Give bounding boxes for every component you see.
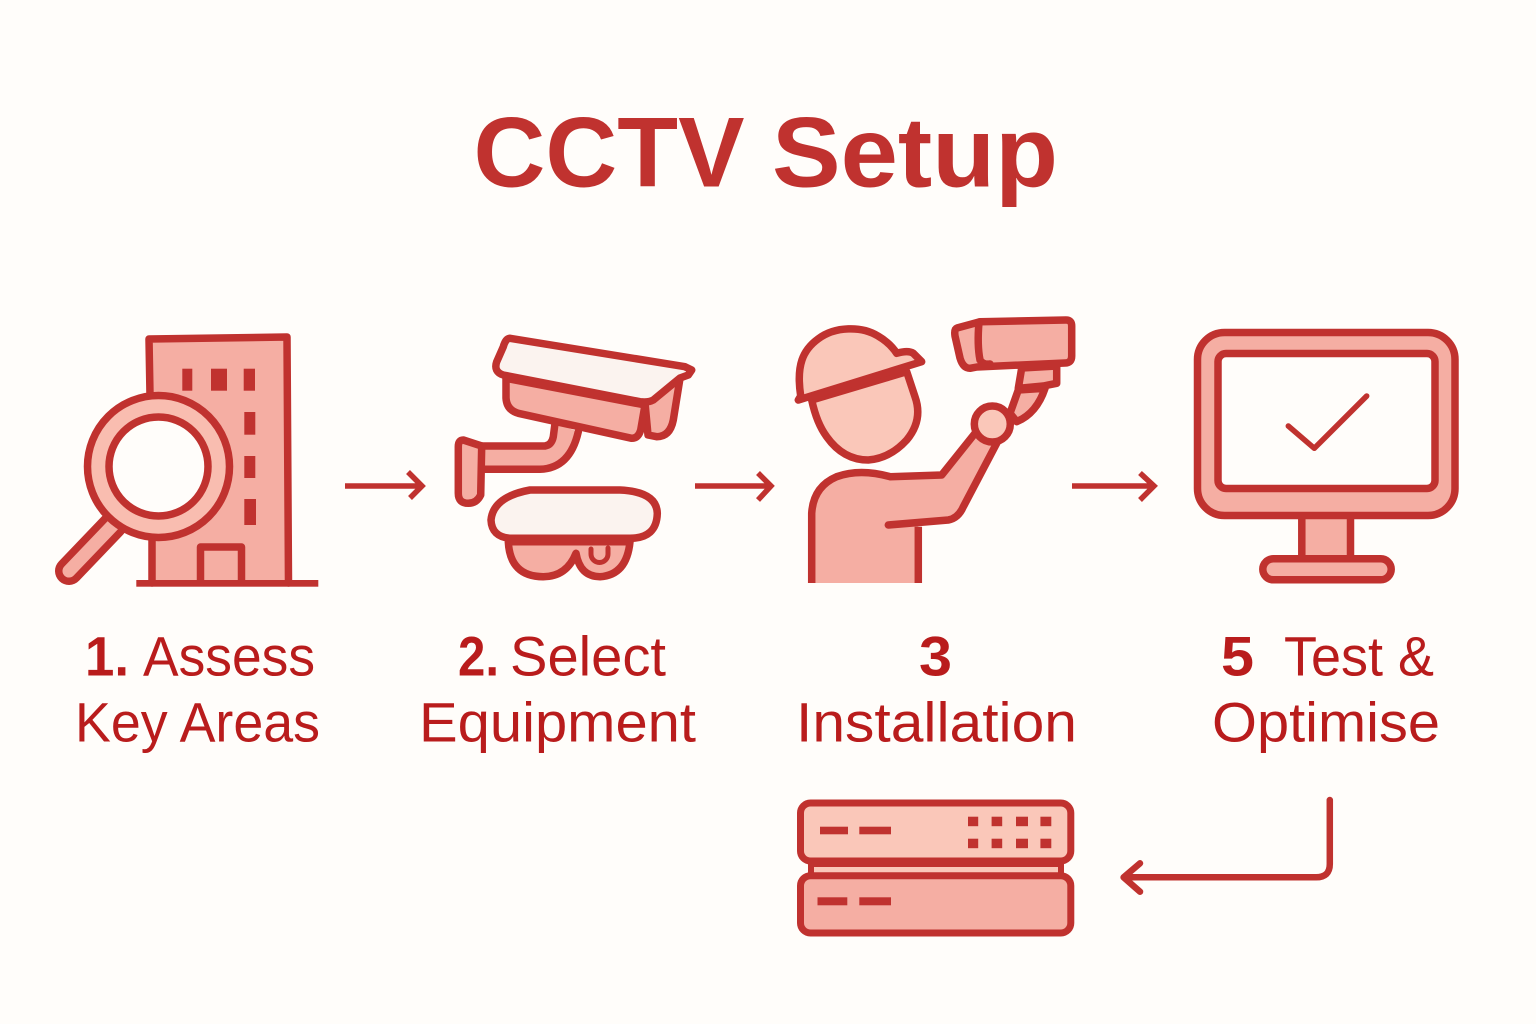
icon: technician installing a camera xyxy=(798,320,1072,583)
label: step 5 xyxy=(1212,624,1440,754)
label: step 1: Key Areas xyxy=(75,690,320,754)
technician body xyxy=(812,433,997,583)
label: step 2 xyxy=(419,624,696,754)
label: step 2: Equipment xyxy=(419,690,696,754)
arrow: step 5 back to recorder xyxy=(1124,800,1330,892)
camera held up xyxy=(955,320,1072,442)
label: step 3: Installation xyxy=(796,690,1077,754)
monitor screen xyxy=(1218,354,1435,488)
icon: monitor with check mark xyxy=(1198,332,1455,580)
check mark xyxy=(1288,396,1367,448)
icon: network video recorder xyxy=(800,803,1071,933)
monitor base xyxy=(1263,559,1391,580)
label: step 2: Select xyxy=(510,624,666,688)
technician head and helmet xyxy=(798,329,922,460)
label: step 5: 5 xyxy=(1221,624,1254,688)
label: step 2: 2. xyxy=(458,624,499,688)
arrow: step 3 to step 5 xyxy=(1072,473,1154,500)
recorder connector xyxy=(811,864,1061,876)
label: step 5: Optimise xyxy=(1212,690,1440,754)
icon: security cameras xyxy=(458,338,692,577)
dome camera xyxy=(491,490,657,577)
building xyxy=(136,337,318,587)
label: step 1 xyxy=(75,624,320,754)
label: step 1: Assess xyxy=(143,624,315,688)
monitor frame xyxy=(1198,332,1455,516)
arrow: step 2 to step 3 xyxy=(695,473,771,500)
title: CCTV xyxy=(474,96,744,208)
label: step 1: 1. xyxy=(85,624,129,688)
bullet camera xyxy=(458,338,692,503)
icon: building with magnifying glass xyxy=(69,337,318,587)
label: step 5: Test & xyxy=(1284,624,1434,688)
monitor stand xyxy=(1302,515,1350,559)
recorder bottom unit xyxy=(800,876,1071,933)
arrow: step 1 to step 2 xyxy=(345,472,422,498)
title xyxy=(474,96,1058,208)
label: step 3 xyxy=(796,624,1077,754)
title: Setup xyxy=(772,96,1058,208)
label: step 3: 3 xyxy=(919,624,952,688)
magnifying glass xyxy=(69,396,230,571)
recorder top unit xyxy=(800,803,1071,861)
